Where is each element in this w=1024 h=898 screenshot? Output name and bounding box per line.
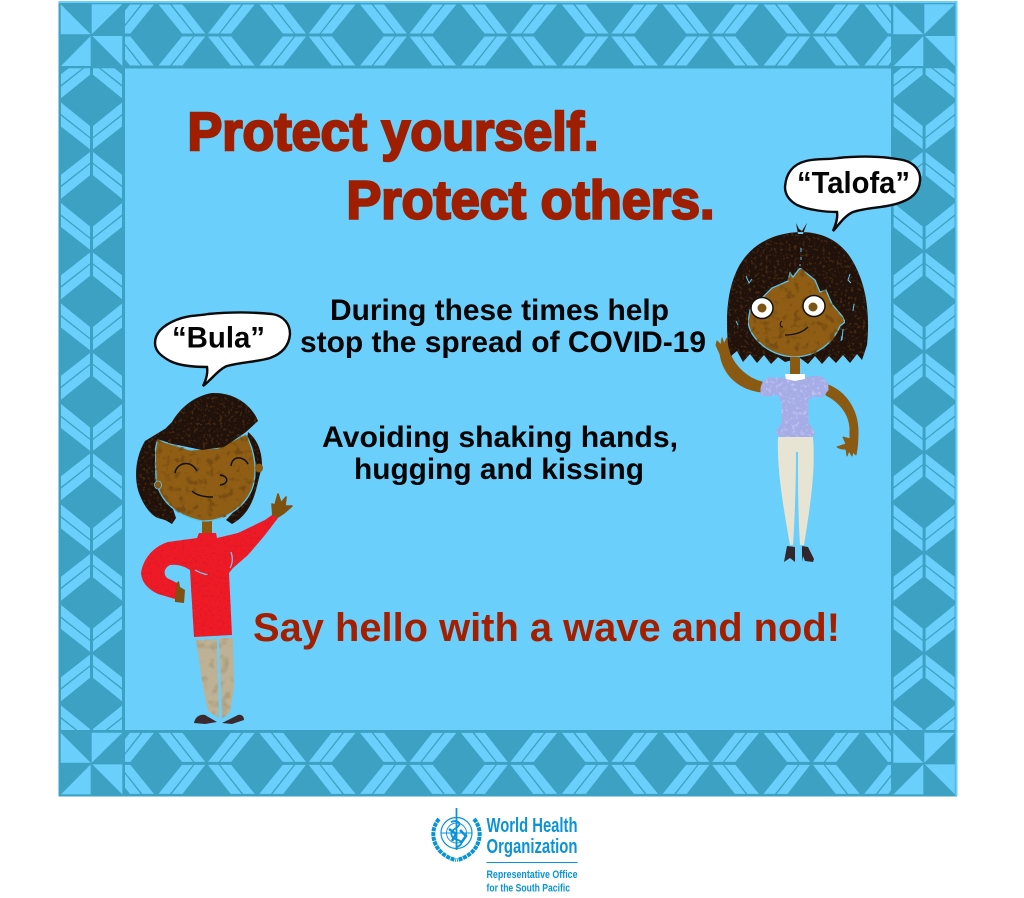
WHO logo xyxy=(433,808,578,894)
title line 1: Protect yourself. xyxy=(188,102,598,162)
character: boy waving (Bula) xyxy=(136,393,292,724)
WHO wordmark: Organization xyxy=(486,836,578,858)
text block: stop the spread: stop the spread of COVID-19 xyxy=(300,326,706,359)
boy hair xyxy=(166,393,258,450)
speech bubble: Bula xyxy=(155,312,290,386)
boy facial features xyxy=(154,458,263,497)
girl hair xyxy=(727,223,868,364)
boy trousers xyxy=(196,638,234,719)
girl facial features xyxy=(751,296,844,335)
girl hair highlights xyxy=(736,248,854,341)
boy back hair xyxy=(136,427,262,524)
boy tucked hand xyxy=(175,581,185,603)
WHO wordmark xyxy=(486,815,578,894)
WHO emblem xyxy=(433,808,480,860)
boy shoes xyxy=(194,715,244,724)
character: girl waving (Talofa) xyxy=(716,223,868,562)
patterned border frame xyxy=(58,1,960,802)
boy neck xyxy=(202,520,212,536)
text block: avoid contact: Avoiding shaking hands, xyxy=(322,421,678,454)
WHO wordmark: for the South Pacific xyxy=(486,882,570,894)
speech bubble: Bula: “Bula” xyxy=(172,322,265,354)
text block: stop the spread: During these times help xyxy=(330,294,669,327)
call to action: Say hello with a wave and nod! xyxy=(253,606,840,650)
girl trousers xyxy=(778,437,814,545)
WHO wordmark: Representative Office xyxy=(486,869,578,881)
boy red sweater xyxy=(141,515,278,637)
text block: stop the spread xyxy=(300,294,706,359)
WHO wordmark: World Health xyxy=(486,815,578,837)
boy face xyxy=(155,434,255,521)
girl face xyxy=(748,268,845,357)
speech bubble: Talofa xyxy=(785,157,920,231)
girl shoes xyxy=(784,546,814,562)
central light blue panel xyxy=(125,68,891,730)
girl right arm and hand xyxy=(826,385,858,456)
boy sweater fold marks xyxy=(195,552,232,574)
boy waving hand xyxy=(272,494,292,517)
speech bubble: Talofa: “Talofa” xyxy=(797,165,910,200)
girl collar xyxy=(785,374,805,381)
girl blouse xyxy=(761,376,828,440)
girl left arm and hand xyxy=(716,338,762,392)
text block: avoid contact: hugging and kissing xyxy=(354,453,644,486)
title line 2: Protect others. xyxy=(346,170,714,230)
text block: avoid contact xyxy=(322,421,678,486)
girl neck xyxy=(790,355,800,377)
